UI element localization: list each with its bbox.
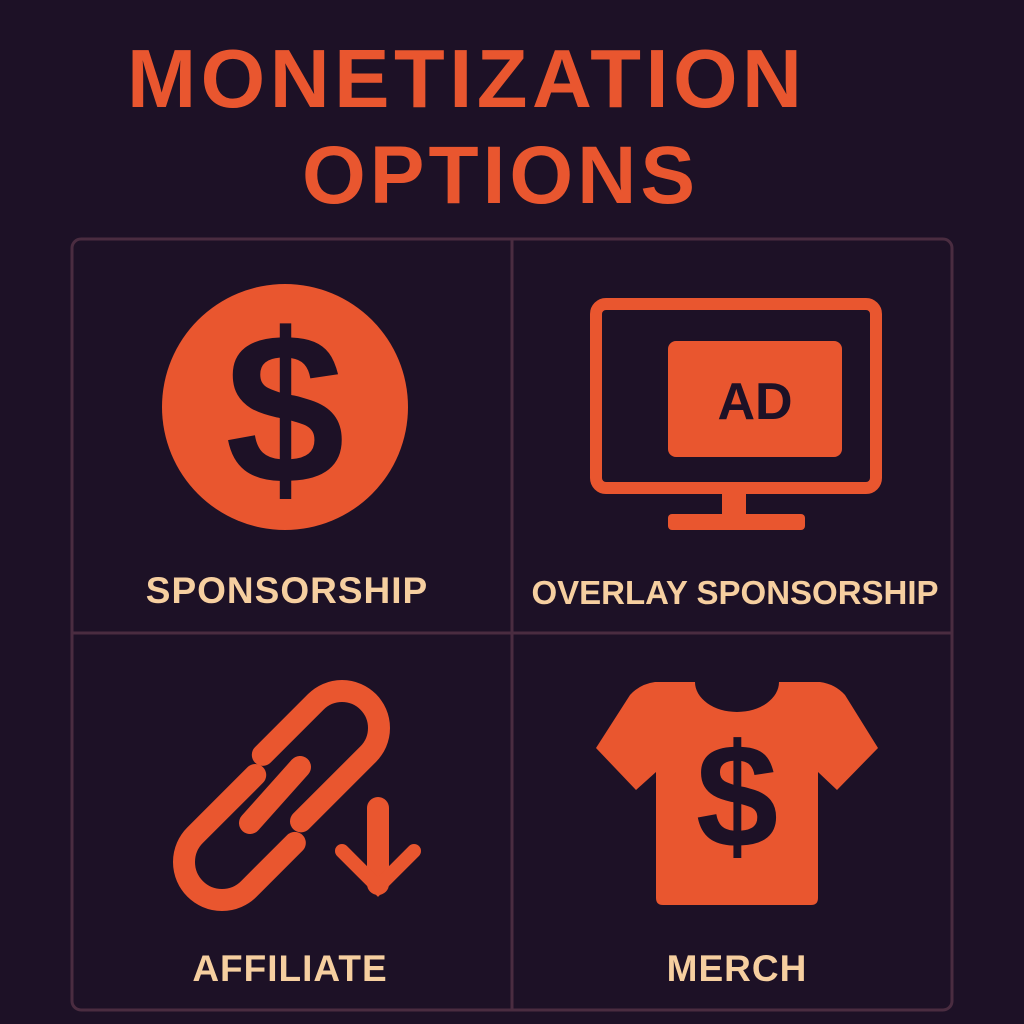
title: OPTIONS bbox=[302, 130, 699, 221]
icon: monitor with AD bbox=[596, 304, 876, 530]
title: MONETIZATION bbox=[127, 32, 806, 125]
icon: chain link with arrow bbox=[168, 676, 414, 916]
icon: dollar coin: $ bbox=[225, 288, 345, 529]
title bbox=[127, 32, 806, 221]
icon: t-shirt with dollar: $ bbox=[696, 714, 778, 879]
label: affiliate: AFFILIATE bbox=[192, 948, 388, 989]
label: sponsorship: SPONSORSHIP bbox=[146, 570, 428, 611]
icon: t-shirt with dollar bbox=[596, 682, 878, 905]
icon: dollar coin bbox=[162, 284, 408, 530]
label: merch: MERCH bbox=[667, 948, 807, 989]
label: overlay sponsorship: OVERLAY SPONSORSHIP bbox=[531, 574, 939, 611]
icon: monitor with AD: AD bbox=[717, 373, 793, 431]
